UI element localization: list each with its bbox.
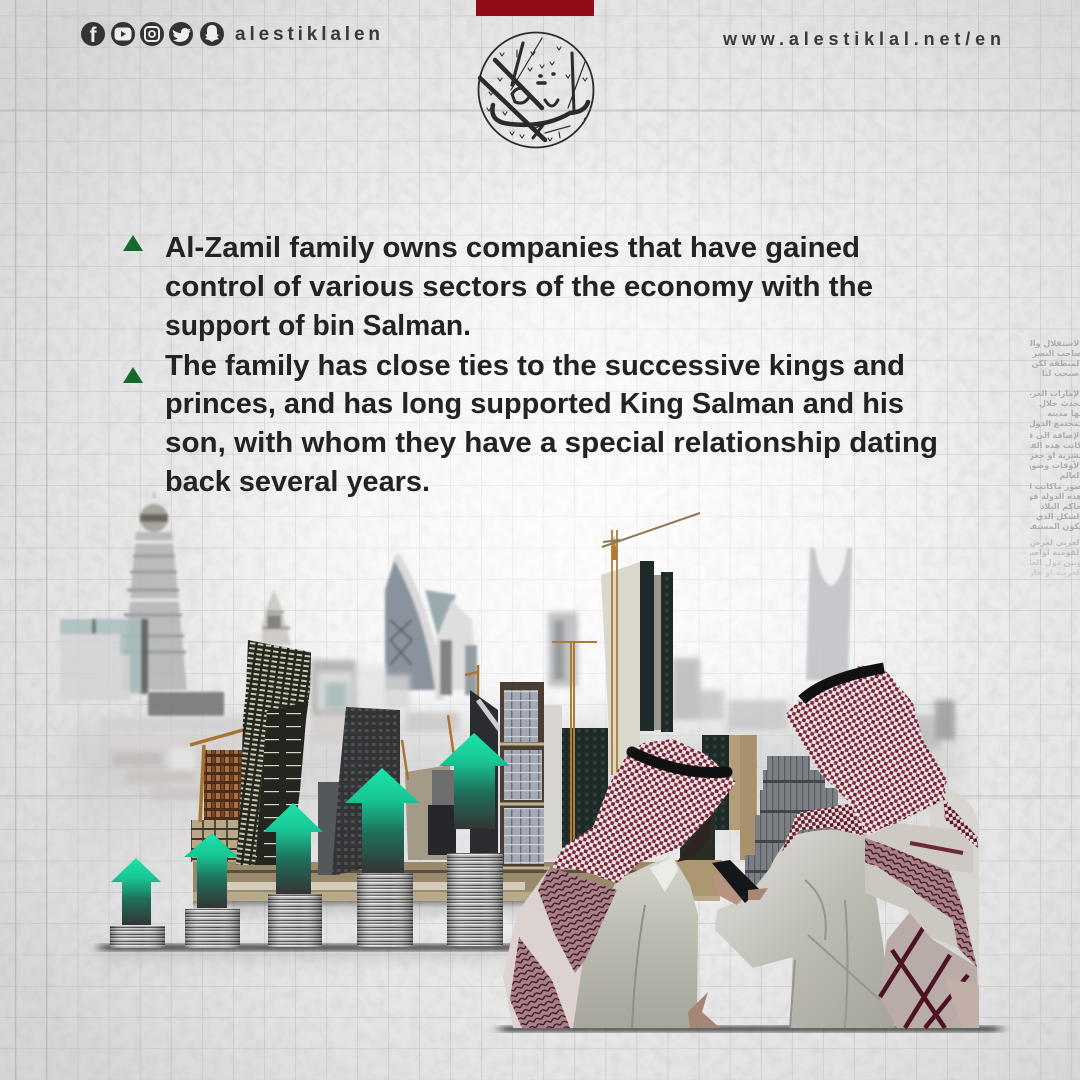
twisted black tower: [236, 640, 311, 865]
ground shadow under men: [500, 1026, 1000, 1032]
arrow 5: [439, 733, 510, 829]
zigzag shawl middle: [865, 838, 977, 967]
tall building with crane: [601, 513, 700, 775]
dark block behind glass tower: [470, 690, 498, 860]
newspaper text fragment on right edge: بشرية او جغرافية: [1013, 451, 1080, 460]
newspaper text fragment on right edge: الإضافة الى قوتها: [1012, 431, 1080, 440]
right man's headdress: [785, 665, 947, 835]
dark green tower: [562, 728, 608, 853]
text block: first point: support of bin Salman.: [165, 310, 471, 342]
brown scaffold building: [191, 750, 242, 862]
text block: first point: [165, 232, 873, 342]
Kingdom Centre tower: [806, 548, 852, 680]
man on right: [712, 665, 979, 1028]
small dark tower: [318, 782, 340, 875]
text block: first point: control of various sectors of the economy with the: [165, 271, 873, 303]
icon: snapchat: [200, 22, 224, 46]
coin stack 5: [447, 853, 503, 946]
newspaper text fragment on right edge: [1030, 340, 1080, 577]
icon: twitter: [169, 22, 193, 46]
icon: instagram: [140, 22, 164, 46]
construction buildings midground: [190, 513, 850, 923]
central white fold: [865, 863, 958, 948]
haze behind the city: [70, 700, 960, 880]
robe fold shadows: [790, 880, 880, 1028]
text block: second point: son, with whom they have a special relationship dating: [165, 427, 938, 459]
text block: first point: Al-Zamil family owns companies that have gained: [165, 232, 860, 264]
stepped glass tower: [745, 756, 850, 890]
text block: second point: [165, 350, 938, 498]
small domed tower: [262, 590, 291, 645]
beige building: [405, 765, 456, 860]
text block: second point: back several years.: [165, 466, 430, 498]
checker tail on right shoulder: [943, 797, 978, 848]
left man's hand: [688, 992, 720, 1028]
phone and hands: [712, 860, 768, 905]
coin stacks: [110, 853, 503, 948]
emblem: round calligraphic logo: [478, 32, 594, 148]
dark leaning tower: [332, 707, 400, 875]
social media icons: [81, 22, 224, 47]
man on left: [503, 739, 736, 1028]
coin stack 4: [357, 873, 413, 947]
crane mast: [552, 642, 597, 845]
icon: youtube: [111, 22, 135, 46]
icon: facebook: f: [90, 24, 98, 47]
right beige tower: [672, 735, 757, 896]
red top bar: [476, 0, 594, 16]
left man's robe: [573, 857, 698, 1028]
coin stack 2: [185, 909, 240, 948]
ground shade below coins: [100, 948, 530, 966]
right man's black aigal: [802, 668, 884, 700]
social handle: alestiklalen: [235, 24, 380, 45]
newspaper text fragment on right edge: الأوقات وصور موتة: [1006, 460, 1080, 470]
coin stack 3: [268, 894, 322, 947]
two men in red keffiyeh: [503, 665, 979, 1028]
text block: second point: The family has close ties to the successive kings and: [165, 350, 905, 382]
arched glass tower: [385, 555, 477, 700]
rising green arrows: [111, 733, 510, 925]
upper white fold: [865, 823, 973, 873]
collar: [650, 857, 678, 892]
right man's robe: [715, 829, 895, 1028]
left man's shawl: [503, 867, 617, 1028]
left man's headdress: [552, 739, 736, 883]
icon: facebook: [81, 22, 105, 47]
shawl dark stripe: [910, 843, 963, 853]
newspaper text fragment on right edge: المنطقة لكن وبين: [1010, 359, 1080, 368]
robe seam: [632, 905, 645, 1028]
newspaper text fragment on right edge: العربي لعرض الغد: [1012, 538, 1080, 548]
cranes centre: [402, 665, 478, 780]
beard: [677, 812, 712, 862]
back panel of white robe: [930, 788, 979, 1028]
Faisaliah tower: [122, 490, 187, 690]
arrow 1: [111, 858, 161, 925]
blurred distant skyline: [60, 490, 960, 880]
glass stacked tower: [498, 682, 550, 870]
bullet triangle 1: [123, 235, 143, 251]
website url: www.alestiklal.net/en: [722, 29, 1001, 49]
text block: second point: princes, and has long supported King Salman and his: [165, 388, 904, 420]
newspaper text fragment on right edge: الاستقلال والعلاقات: [1003, 339, 1080, 348]
ground platform: [193, 862, 720, 898]
ground shadow under coins: [100, 944, 540, 951]
lower plaid of shawl: [880, 912, 979, 1028]
teal block beside Faisaliah: [60, 619, 148, 700]
white strip building: [544, 705, 562, 860]
bullet triangle 2: [123, 367, 143, 383]
low dark block: [148, 692, 224, 716]
arrow 3: [263, 803, 323, 894]
shawl band over shoulder: [782, 790, 947, 852]
hazy low-rise city band: [100, 612, 955, 800]
crane left: [190, 730, 243, 822]
left man's black aigal: [632, 752, 727, 773]
arrow 4: [345, 768, 420, 873]
coin stack 1: [110, 926, 165, 948]
newspaper text fragment on right edge: صور ماكانت للملك: [1010, 482, 1080, 491]
arrow 2: [184, 833, 238, 908]
